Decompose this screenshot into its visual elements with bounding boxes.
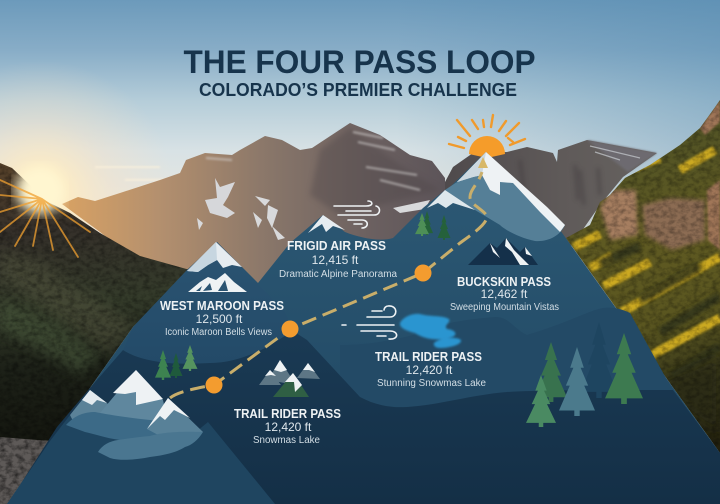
dark lower ground: [7, 331, 720, 504]
background: rocky scree: [0, 437, 50, 504]
icon: blue lake: [400, 314, 461, 348]
label: West Maroon Pass: Iconic Maroon Bells Views: [165, 327, 272, 338]
label: Buckskin Pass: [450, 274, 559, 313]
label: Buckskin Pass: Sweeping Mountain Vistas: [450, 302, 559, 313]
icon: West Maroon peaks: [188, 273, 247, 292]
background: right autumn hillside: [566, 100, 720, 453]
label: Trail Rider Pass, Stunning Snowmas Lake: [375, 349, 486, 389]
label: Trail Rider Pass, Stunning Snowmas Lake: TRAIL RIDER PASS: [375, 349, 482, 364]
label: Trail Rider Pass, Snowmas Lake: 12,420 ft: [265, 420, 312, 434]
icon: wind, Trail Rider: [342, 306, 397, 339]
trees: Buckskin slope: [415, 211, 450, 240]
label: West Maroon Pass: 12,500 ft: [196, 312, 243, 326]
waypoint nodes: [206, 264, 432, 394]
label: Buckskin Pass: 12,462 ft: [481, 287, 528, 301]
background: left forest hillside: [0, 163, 190, 441]
Buckskin snowy upper slope: [427, 152, 565, 241]
label: Trail Rider Pass, Snowmas Lake: [234, 406, 341, 446]
panel: illustrated mountain silhouette: [7, 152, 720, 504]
trees: West Maroon base: [155, 345, 198, 380]
Trail Rider hill band: [340, 308, 673, 407]
icon: sun behind Buckskin: [449, 115, 525, 158]
background: Maroon Bells mountains: [62, 123, 657, 300]
background: left sunburst: [0, 166, 90, 257]
subtitle: COLORADO’S PREMIER CHALLENGE: [199, 79, 517, 100]
title: THE FOUR PASS LOOP: [184, 44, 536, 80]
Frigid Air mountain cap: [308, 215, 345, 233]
snow patch: [205, 178, 235, 218]
label: Trail Rider Pass, Snowmas Lake: TRAIL RIDER PASS: [234, 406, 341, 421]
label: Trail Rider Pass, Stunning Snowmas Lake: Stunning Snowmas Lake: [377, 378, 486, 389]
label: West Maroon Pass: [160, 298, 284, 338]
trees: right forest: [526, 322, 643, 427]
label: Trail Rider Pass, Snowmas Lake: Snowmas Lake: [253, 435, 320, 446]
label: West Maroon Pass: WEST MAROON PASS: [160, 298, 284, 313]
icon: Buckskin peaks: [468, 238, 538, 265]
label: Frigid Air Pass: [279, 238, 397, 280]
label: Frigid Air Pass: 12,415 ft: [312, 253, 359, 267]
foreground slope: [7, 415, 275, 504]
hiking trail: [170, 157, 488, 398]
icon: wind, Frigid Air: [334, 201, 380, 228]
label: Frigid Air Pass: Dramatic Alpine Panorama: [279, 269, 397, 280]
label: Trail Rider Pass, Stunning Snowmas Lake: 12,420 ft: [406, 363, 453, 377]
West Maroon mountain: [123, 242, 293, 364]
label: Frigid Air Pass: FRIGID AIR PASS: [287, 238, 386, 253]
label: Buckskin Pass: BUCKSKIN PASS: [457, 274, 551, 289]
small mountain range: [66, 370, 203, 460]
icon: Trail Rider peaks: [259, 360, 320, 397]
